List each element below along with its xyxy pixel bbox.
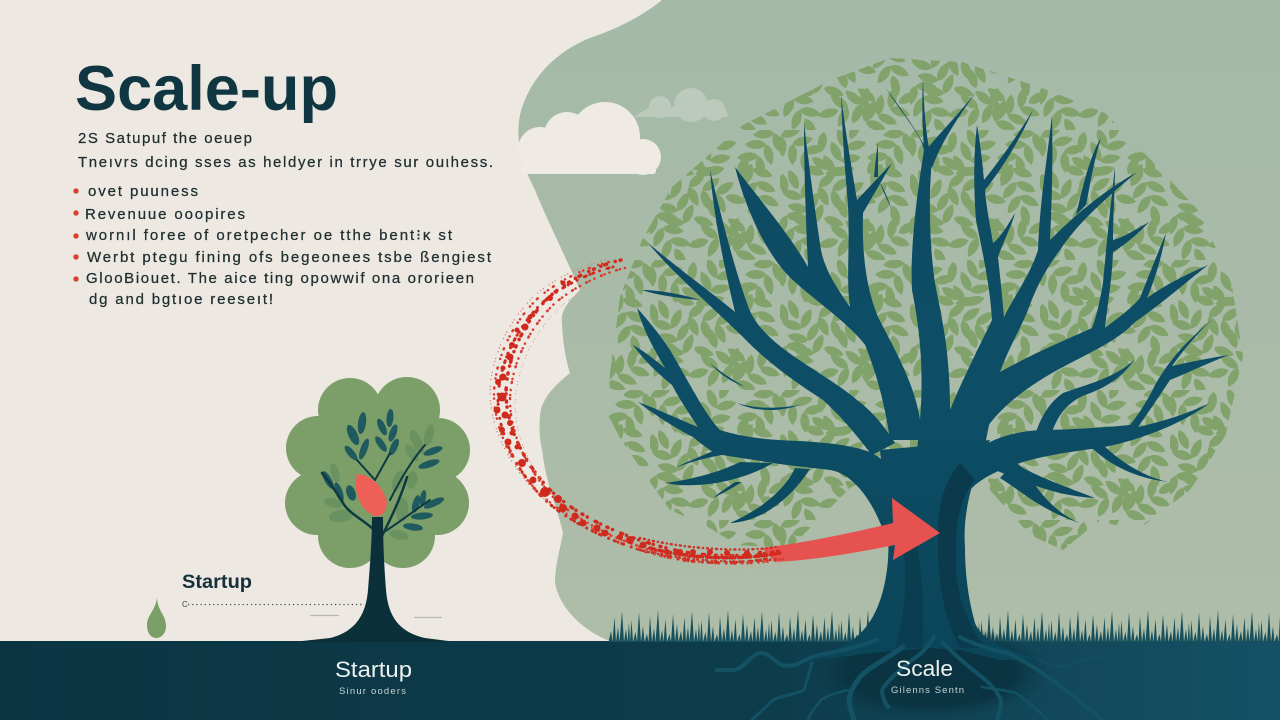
- small tree dark leaves: [320, 409, 445, 532]
- large tree canopy of leaves: [608, 58, 1243, 550]
- small ground ticks: [310, 616, 442, 618]
- small tree trunk and roots: [293, 517, 456, 642]
- scale caption: Gilenns Sentn: [891, 685, 964, 696]
- large tree branches: [633, 79, 1229, 530]
- startup caption: Sinur ooders: [339, 686, 406, 697]
- intro text block: Tneıvrs dcing sses as heldyer in trrye sur ouιhess.: [78, 154, 493, 171]
- large tree trunk: [815, 440, 1040, 660]
- dark strand right: [938, 463, 985, 648]
- scale caption: [891, 656, 964, 696]
- dark strand left: [895, 545, 923, 648]
- bullet list: Revenuue ooopires: [85, 206, 245, 223]
- bullet list: wornıl foree of oretpecher oe tthe bent⁝ᴋ st: [85, 227, 453, 244]
- ground strip: [0, 641, 1280, 720]
- red highlight leaf: [356, 474, 387, 516]
- particle trail: red scatter turning into arrow: [490, 260, 788, 568]
- seed leaf: [147, 597, 166, 638]
- background: sage green hill shape: [518, 0, 1280, 642]
- bullet list: GlooBiouet. The aice ting opowwif ona ororieen: [86, 270, 474, 287]
- startup caption: [335, 657, 412, 697]
- small startup tree: [285, 377, 470, 642]
- large particles: [494, 280, 762, 556]
- title: Scale-up: [75, 54, 338, 124]
- startup label above ground: Startup: [182, 572, 252, 593]
- bullet list: ovet puuness: [88, 183, 198, 200]
- intro text block: 2S Satupuf the oeuep: [78, 130, 252, 147]
- grass: [609, 610, 1280, 642]
- bullet markers: [73, 188, 79, 282]
- small tree light leaves: [323, 423, 436, 541]
- dark soil under trunk: [810, 624, 1050, 720]
- cloud: white: [518, 102, 661, 175]
- arrow: [762, 498, 940, 562]
- small tree branches: [322, 445, 430, 540]
- intro text block: [78, 130, 493, 171]
- dotted leader line: C: [182, 600, 188, 609]
- fine particles: [490, 260, 788, 568]
- startup caption: Startup: [335, 657, 412, 682]
- bullet list: [73, 183, 492, 308]
- bullet list: Werbt ptegu fining ofs begeonees tsbe ßengiest: [87, 249, 492, 266]
- small tree canopy: [285, 377, 470, 568]
- scale caption: Scale: [896, 656, 953, 681]
- roots: [717, 637, 1107, 720]
- cloud: pale: [633, 88, 728, 122]
- bullet list: dg and bgtıoe reeseıt!: [89, 291, 273, 308]
